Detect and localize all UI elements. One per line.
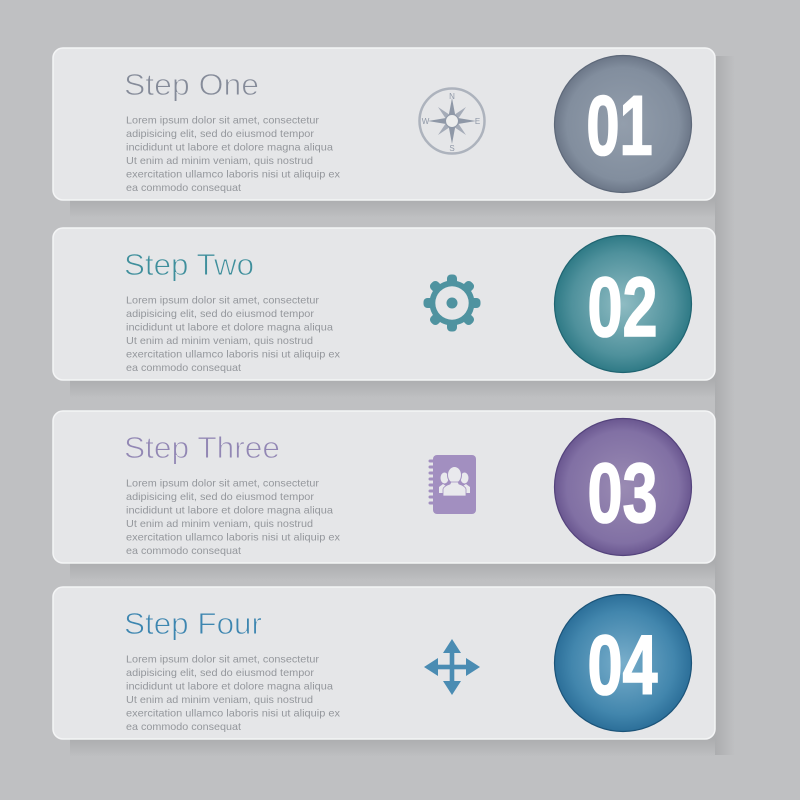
icon: compass: N [449,92,455,101]
icon: compass: S [449,144,455,153]
text block: step three: Lorem ipsum dolor sit amet, consectetur [126,477,320,489]
text block: step three: adipisicing elit, sed do eiusmod tempor [126,491,315,503]
number badge: 03 [554,418,692,556]
number badge: 04 [554,594,692,732]
text block: step two [126,294,341,374]
text block: step two: incididunt ut labore et dolore magna aliqua [126,321,333,333]
panel: step four [53,587,735,757]
text block: step three: exercitation ullamco laboris nisi ut aliquip ex [126,531,341,543]
panel: step one [53,48,735,238]
text block: step one: Ut enim ad minim veniam, quis nostrud [126,155,313,167]
text block: step two: adipisicing elit, sed do eiusmod tempor [126,308,315,320]
heading: step three: Step Three [124,430,280,465]
icon: gear [424,274,480,332]
icon: address book [430,455,476,514]
text block: step four: Ut enim ad minim veniam, quis nostrud [126,694,313,706]
icon: four-way arrows [424,639,480,695]
text block: step two: ea commodo consequat [126,362,241,374]
text block: step three [126,477,341,557]
icon: compass: W [422,117,430,126]
icon: compass: E [475,117,480,126]
text block: step four: exercitation ullamco laboris nisi ut aliquip ex [126,707,341,719]
text block: step one: exercitation ullamco laboris nisi ut aliquip ex [126,168,341,180]
text block: step four: Lorem ipsum dolor sit amet, consectetur [126,653,320,665]
number badge: 01 [554,56,692,192]
text block: step four: ea commodo consequat [126,721,241,733]
number badge: 01: 01 [586,80,653,173]
heading: step one: Step One [124,67,259,102]
number badge: 04: 04 [587,618,658,712]
text block: step four: incididunt ut labore et dolore magna aliqua [126,680,333,692]
heading: step two: Step Two [124,247,254,282]
number badge: 02: 02 [587,260,658,354]
text block: step four: adipisicing elit, sed do eiusmod tempor [126,667,315,679]
text block: step three: ea commodo consequat [126,545,241,557]
text block: step one: ea commodo consequat [126,182,241,194]
text block: step one: incididunt ut labore et dolore magna aliqua [126,141,333,153]
text block: step four [126,653,341,733]
text block: step two: exercitation ullamco laboris nisi ut aliquip ex [126,348,341,360]
number badge: 03: 03 [587,446,658,540]
panel: step two [53,228,735,419]
text block: step two: Lorem ipsum dolor sit amet, consectetur [126,294,320,306]
text block: step one: Lorem ipsum dolor sit amet, consectetur [126,114,320,126]
text block: step one [126,114,341,194]
text block: step three: incididunt ut labore et dolore magna aliqua [126,504,333,516]
icon: compass [420,88,484,154]
text block: step two: Ut enim ad minim veniam, quis nostrud [126,335,313,347]
heading: step four: Step Four [124,606,262,641]
panel: step three [53,411,735,595]
text block: step three: Ut enim ad minim veniam, quis nostrud [126,518,313,530]
text block: step one: adipisicing elit, sed do eiusmod tempor [126,128,315,140]
number badge: 02 [554,236,692,372]
